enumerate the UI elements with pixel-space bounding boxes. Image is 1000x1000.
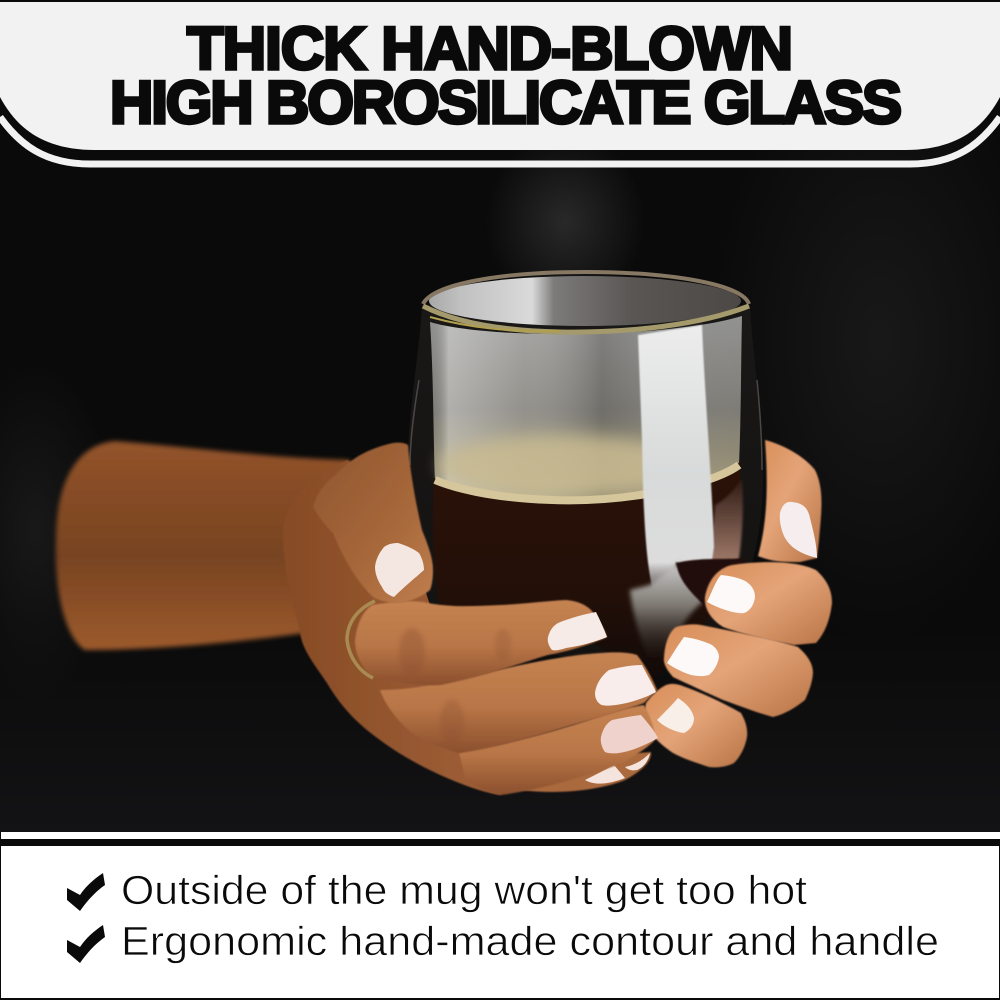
thumb — [313, 443, 433, 603]
glass — [408, 272, 763, 685]
gold ring — [347, 601, 375, 678]
light reflection band — [638, 325, 714, 595]
left ring finger — [459, 705, 655, 795]
back of hand — [283, 460, 501, 795]
title — [110, 15, 902, 136]
check icon 1 — [67, 873, 105, 911]
coffee seen under reflection — [676, 558, 745, 610]
feature text 2: Ergonomic hand-made contour and handle — [121, 918, 939, 964]
footer panel — [0, 832, 1000, 1000]
title: THICK HAND-BLOWN — [187, 15, 793, 82]
glass outer wall — [408, 305, 763, 685]
check icon 2 — [67, 925, 105, 963]
knuckle shading index — [399, 628, 425, 676]
header banner — [0, 2, 1000, 164]
nail right middle — [667, 637, 719, 676]
foam steam zone — [440, 435, 690, 495]
knuckle shading middle — [440, 700, 464, 744]
white curved outline — [0, 117, 1000, 164]
title: HIGH BOROSILICATE GLASS — [110, 69, 902, 136]
forearm — [56, 441, 350, 650]
rim gold front edge — [423, 306, 749, 332]
nail right index — [707, 575, 755, 613]
coffee — [433, 462, 740, 685]
nail right top — [780, 502, 817, 558]
nail right ring — [657, 698, 694, 733]
feature text 1: Outside of the mug won't get too hot — [121, 867, 808, 913]
finger seen through glass — [700, 478, 743, 565]
right hand top finger — [758, 440, 822, 562]
left index finger — [355, 600, 607, 685]
nail left index — [548, 612, 607, 650]
banner panel — [0, 2, 1000, 150]
rim inner — [429, 276, 741, 326]
nail thumb — [375, 543, 424, 597]
rim back edge — [423, 272, 749, 304]
glass wall edge highlights — [410, 380, 762, 470]
little fingers — [520, 752, 651, 792]
glass frosted upper — [430, 316, 742, 505]
right ring finger — [645, 684, 747, 767]
right middle finger — [664, 624, 813, 717]
nail left ring — [601, 715, 658, 753]
steam above glass — [485, 132, 645, 312]
lower glass reflection — [630, 560, 705, 665]
left middle finger — [380, 652, 657, 753]
nail left middle — [595, 665, 656, 706]
little finger nails — [585, 753, 650, 784]
crema line — [435, 465, 739, 500]
right index finger — [705, 562, 832, 645]
